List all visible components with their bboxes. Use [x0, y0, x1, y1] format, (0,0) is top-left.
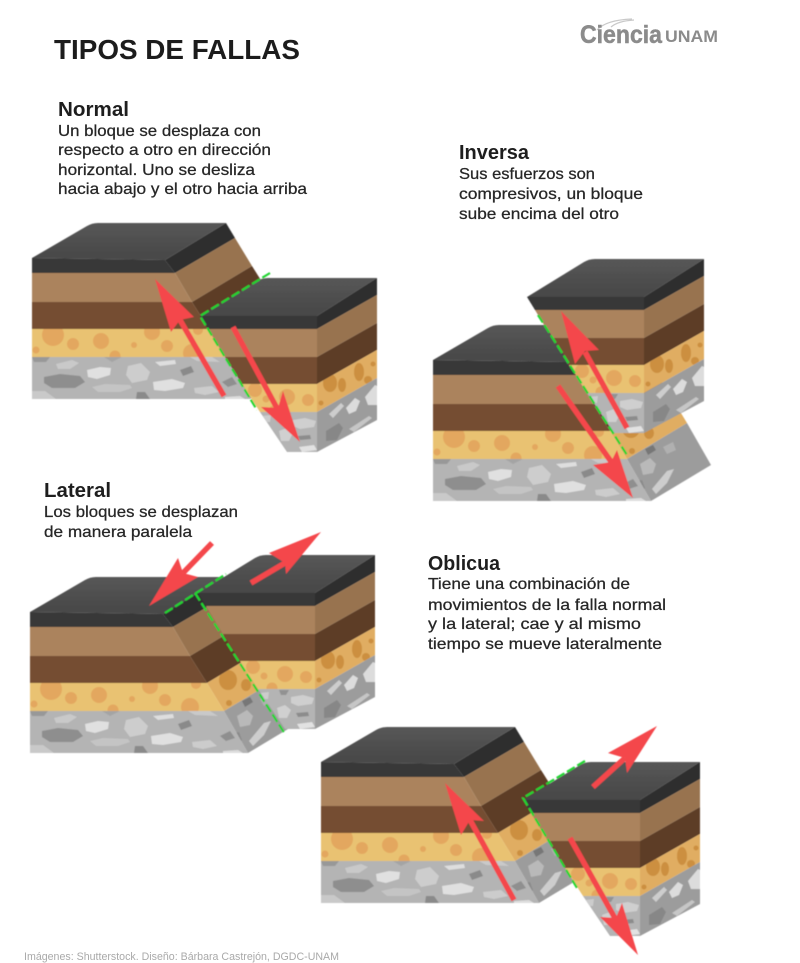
- text block: Oblicua: Tiene una combinación de: [428, 576, 630, 593]
- footer credit: Imágenes: Shutterstock. Diseño: Bárbara Castrejón, DGDC-UNAM: [24, 951, 339, 963]
- text block: Lateral: de manera paralela: [44, 524, 192, 541]
- text block: Inversa: Sus esfuerzos son: [459, 166, 595, 183]
- text block: Inversa: sube encima del otro: [459, 206, 619, 223]
- text block: Inversa: [459, 142, 643, 223]
- text block: Lateral: Los bloques se desplazan: [44, 504, 238, 521]
- arrow: down: [233, 327, 300, 442]
- title: TIPOS DE FALLAS: [54, 34, 300, 65]
- arrow: up: [155, 279, 224, 396]
- arrow: up: [561, 311, 627, 428]
- arrow: down: [558, 386, 633, 498]
- logo: Ciencia UNAM: [580, 19, 718, 49]
- fault line: [200, 273, 270, 410]
- text block: Inversa: compresivos, un bloque: [459, 186, 643, 203]
- fault line: [523, 761, 585, 888]
- fault line: [165, 574, 285, 734]
- arrow: left: [149, 543, 212, 606]
- logo: Ciencia UNAM: UNAM: [665, 27, 718, 46]
- fault line: [538, 315, 627, 455]
- text block: Oblicua: [428, 553, 666, 653]
- diagram: reverse fault: [433, 259, 711, 501]
- text block: Lateral: [44, 480, 238, 541]
- diagram: normal fault: [32, 223, 377, 452]
- text block: Normal: respecto a otro en dirección: [58, 142, 271, 159]
- text block: Normal: hacia abajo y el otro hacia arriba: [58, 181, 307, 198]
- diagram: oblique fault: [321, 726, 700, 955]
- text block: Oblicua: movimientos de la falla normal: [428, 597, 666, 614]
- text block: Oblicua: y la lateral; cae y al mismo: [428, 616, 641, 633]
- text block: Normal: [58, 99, 307, 198]
- text block: Oblicua: Oblicua: [428, 553, 501, 575]
- arrow: down: [570, 838, 638, 955]
- text block: Oblicua: tiempo se mueve lateralmente: [428, 636, 662, 653]
- text block: Normal: horizontal. Uno se desliza: [58, 162, 255, 179]
- arrow: up right: [593, 726, 657, 787]
- arrow: right: [251, 532, 321, 583]
- logo: Ciencia UNAM: Ciencia: [580, 21, 663, 49]
- text block: Lateral: Lateral: [44, 480, 111, 502]
- text block: Inversa: Inversa: [459, 142, 530, 164]
- text block: Normal: Un bloque se desplaza con: [58, 123, 261, 140]
- diagram: lateral fault: [30, 532, 375, 753]
- arrow: up: [445, 783, 514, 900]
- text block: Normal: Normal: [58, 99, 129, 121]
